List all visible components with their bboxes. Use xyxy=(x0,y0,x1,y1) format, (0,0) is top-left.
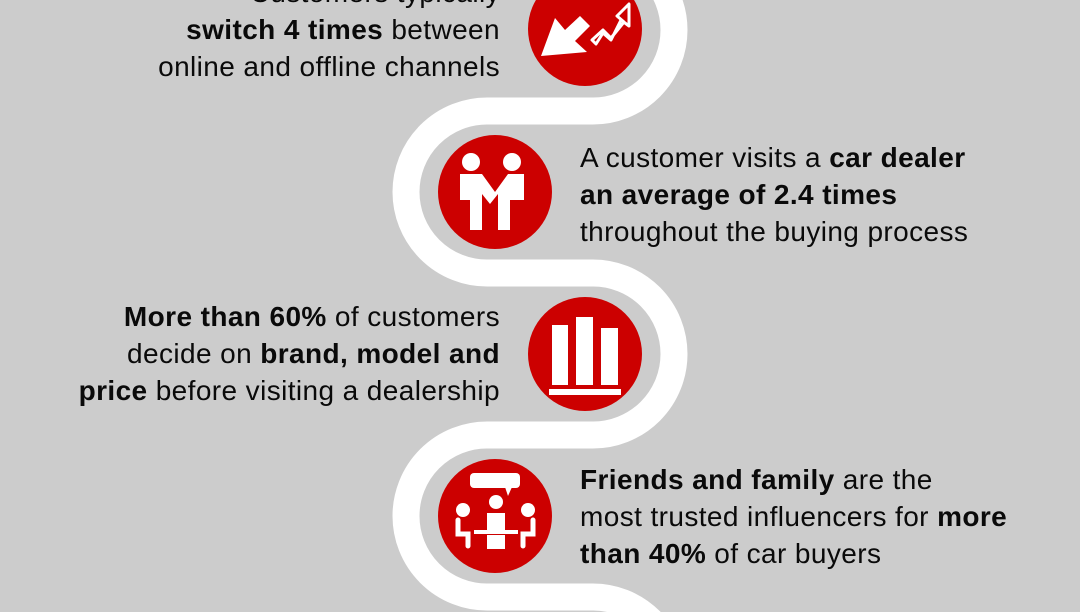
text block 4: than 40% of car buyers xyxy=(580,538,881,569)
text block 2: an average of 2.4 times xyxy=(580,179,897,210)
text block 1 xyxy=(158,0,500,82)
text block 3: decide on brand, model and xyxy=(127,338,500,369)
text block 3: price before visiting a dealership xyxy=(79,375,500,406)
text block 2: A customer visits a car dealer xyxy=(580,142,966,173)
text block 1: switch 4 times between xyxy=(186,14,500,45)
text block 2 xyxy=(580,142,968,247)
text block 3: More than 60% of customers xyxy=(124,301,500,332)
text block 2: throughout the buying process xyxy=(580,216,968,247)
text block 3 xyxy=(79,301,500,406)
text block 4: Friends and family are the xyxy=(580,464,933,495)
text block 1: online and offline channels xyxy=(158,51,500,82)
text block 4 xyxy=(580,464,1007,569)
text block 4: most trusted influencers for more xyxy=(580,501,1007,532)
